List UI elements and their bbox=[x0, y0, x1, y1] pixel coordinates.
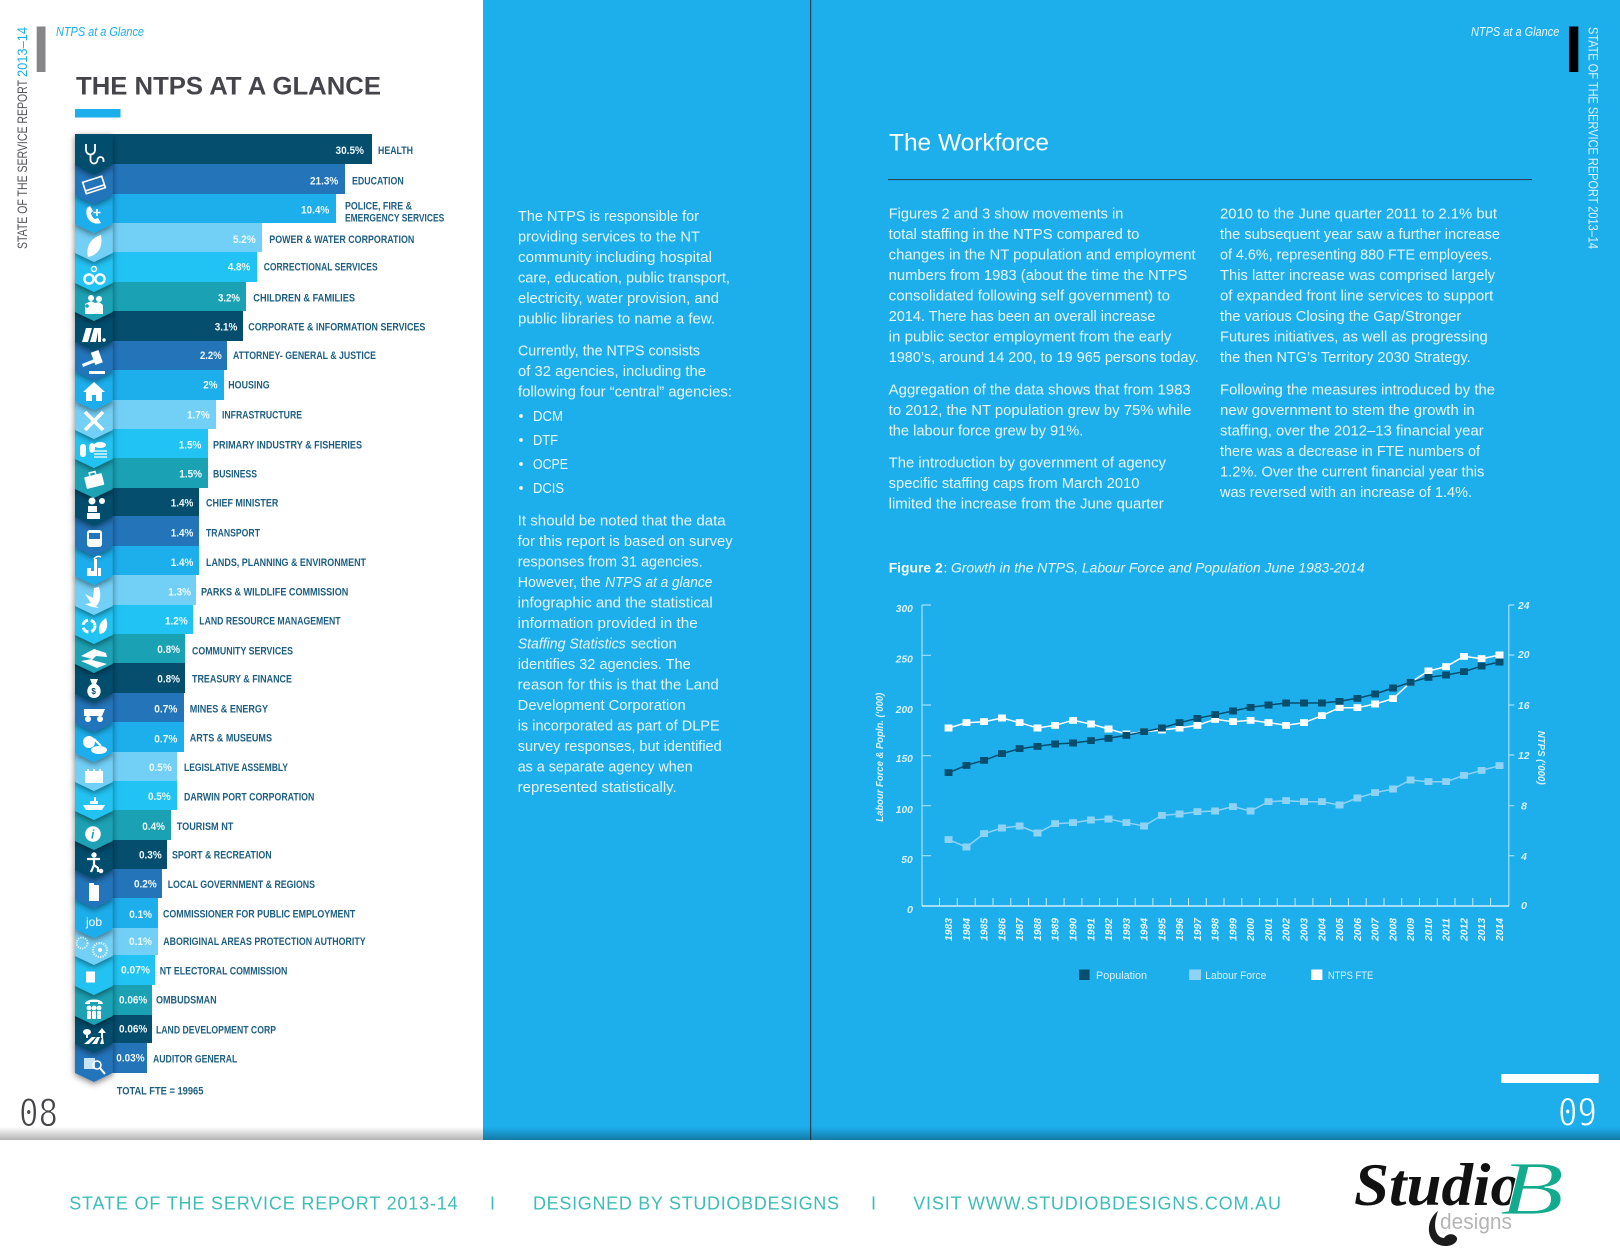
icon: money bag bbox=[87, 679, 101, 698]
bar: Auditor General: 0.03% bbox=[116, 1052, 145, 1064]
bar: Treasury and Finance bbox=[112, 663, 292, 693]
year labels: 2007 bbox=[1371, 918, 1382, 942]
right axis labels: 16 bbox=[1518, 701, 1530, 712]
year labels: 2012 bbox=[1459, 918, 1470, 942]
bar: Mines and Energy: 0.7% bbox=[154, 703, 178, 715]
bar: Arts and Museums bbox=[112, 722, 272, 752]
bar: Education bbox=[112, 164, 404, 194]
bar: Children and Families: CHILDREN & FAMILIES bbox=[253, 293, 355, 305]
text block: NTPS overview column: responses from 31 agencies. bbox=[518, 554, 703, 570]
bar: Transport: TRANSPORT bbox=[206, 528, 260, 540]
text block: workforce column one: the labour force grew by 91%. bbox=[889, 423, 1083, 439]
bar: Mines and Energy: MINES & ENERGY bbox=[190, 703, 268, 715]
year labels: 2006 bbox=[1353, 918, 1364, 942]
heading rule bbox=[888, 179, 1532, 180]
text block: NTPS overview column bbox=[518, 209, 733, 796]
text block: NTPS overview column: DCIS bbox=[533, 481, 564, 497]
bar: Lands, Planning and Environment bbox=[112, 546, 366, 575]
text block: NTPS overview column: represented statistically. bbox=[518, 780, 677, 796]
icon: telephone and people bbox=[85, 1000, 103, 1019]
icon: mining truck bbox=[84, 709, 105, 722]
bar: Parks and Wildlife Commission bbox=[112, 575, 348, 605]
bar: Aboriginal Areas Protection Authority: ABORIGINAL AREAS PROTECTION AUTHORITY bbox=[163, 936, 366, 948]
text block: NTPS overview column: public libraries to name a few. bbox=[518, 312, 715, 328]
page number 09: 09 bbox=[1558, 1092, 1597, 1135]
bar: Education: 21.3% bbox=[310, 175, 339, 187]
bar: Sport and Recreation bbox=[112, 840, 272, 869]
running side title: STATE OF THE SERVICE REPORT bbox=[15, 80, 30, 249]
icon: NT map bbox=[89, 883, 99, 901]
figure caption: Figure 2 bbox=[889, 560, 943, 576]
bar: Primary Industry and Fisheries bbox=[112, 429, 362, 458]
text block: workforce column one bbox=[889, 206, 1199, 513]
section tag: NTPS at a Glance bbox=[1471, 25, 1559, 39]
bar: Aboriginal Areas Protection Authority bbox=[112, 928, 366, 955]
panel: blue background page bbox=[483, 0, 1620, 1140]
line chart: growth in NTPS, labour force and population bbox=[875, 601, 1546, 982]
year labels: 1988 bbox=[1033, 918, 1044, 941]
bar: Corporate and Information Services: 3.1% bbox=[215, 321, 238, 333]
bar: Police, Fire and Emergency Services: EMERGENCY SERVICES bbox=[345, 212, 444, 224]
right axis labels: 12 bbox=[1518, 751, 1530, 762]
text block: workforce column one: limited the increase from the June quarter bbox=[889, 497, 1164, 513]
icon: land and trees bbox=[83, 1028, 106, 1044]
left axis labels: 200 bbox=[895, 705, 913, 716]
white page-number bar bbox=[1501, 1074, 1599, 1083]
bar: Arts and Museums: 0.7% bbox=[154, 734, 178, 746]
text block: workforce column one: changes in the NT population and employment bbox=[889, 248, 1196, 264]
left axis labels: 300 bbox=[896, 604, 913, 615]
bar: Health: HEALTH bbox=[378, 145, 413, 157]
text block: workforce column one: The introduction by government of agency bbox=[889, 456, 1167, 472]
text block: workforce column two: 2010 to the June quarter 2011 to 2.1% but bbox=[1220, 206, 1497, 222]
bar: Corporate and Information Services bbox=[112, 311, 425, 341]
bar: Community Services: 0.8% bbox=[157, 644, 181, 656]
year labels: 1986 bbox=[997, 918, 1008, 941]
bar: Power and Water: 5.2% bbox=[233, 234, 256, 246]
year labels: 2010 bbox=[1424, 918, 1435, 942]
title: THE NTPS AT A GLANCE bbox=[76, 73, 381, 101]
footer credits: DESIGNED BY STUDIOBDESIGNS bbox=[533, 1194, 839, 1214]
right axis labels: 4 bbox=[1520, 852, 1527, 863]
right axis labels: 20 bbox=[1517, 650, 1530, 661]
text block: workforce column one: in public sector employment from the early bbox=[889, 330, 1172, 346]
text block: NTPS overview column: Currently, the NTPS consists bbox=[518, 344, 700, 360]
bar: Commissioner for Public Employment: 0.1% bbox=[129, 909, 153, 921]
text block: workforce column two bbox=[1219, 206, 1500, 501]
bar: Darwin Port Corporation: DARWIN PORT CORPORATION bbox=[184, 791, 314, 803]
icon: ballot bbox=[86, 972, 95, 982]
left page header bbox=[15, 25, 144, 249]
bar: Aboriginal Areas Protection Authority: 0.1% bbox=[129, 936, 153, 948]
bar: Business: BUSINESS bbox=[213, 469, 257, 481]
bar: Police, Fire and Emergency Services bbox=[112, 194, 444, 224]
bars and labels bbox=[112, 134, 444, 1073]
icon: information bbox=[85, 826, 101, 842]
text block: workforce column one: specific staffing caps from March 2010 bbox=[889, 476, 1139, 492]
text block: workforce column two: of 4.6%, representing 880 FTE employees. bbox=[1220, 248, 1492, 264]
bar: Infrastructure bbox=[112, 400, 302, 429]
bar: Tourism NT: 0.4% bbox=[142, 821, 166, 833]
left axis labels bbox=[895, 604, 913, 916]
bar: Housing: 2% bbox=[203, 379, 218, 391]
bar: Legislative Assembly bbox=[112, 752, 288, 781]
right axis labels: 8 bbox=[1521, 802, 1527, 812]
bar: Correctional Services: CORRECTIONAL SERVICES bbox=[264, 262, 378, 274]
icon: gavel bbox=[82, 350, 105, 374]
bar: Treasury and Finance: 0.8% bbox=[157, 674, 181, 686]
series: NTPS FTE bbox=[949, 655, 1500, 734]
text block: workforce column one: total staffing in the NTPS compared to bbox=[889, 227, 1139, 243]
text block: workforce column two: the then NTG’s Territory 2030 Strategy. bbox=[1220, 350, 1471, 366]
bar: Auditor General bbox=[112, 1043, 238, 1073]
text block: NTPS overview column: Staffing Statistics bbox=[518, 636, 626, 652]
icon: wheat and fish bbox=[80, 442, 107, 457]
bar: Power and Water bbox=[112, 223, 414, 252]
bar: Housing: HOUSING bbox=[228, 379, 270, 391]
left axis labels: 50 bbox=[901, 855, 913, 866]
icon: bus bbox=[87, 530, 102, 547]
year labels: 2002 bbox=[1282, 918, 1293, 942]
text block: NTPS overview column: survey responses, but identified bbox=[518, 739, 722, 755]
bar: Mines and Energy bbox=[112, 693, 268, 722]
year labels: 1994 bbox=[1140, 918, 1151, 941]
icon: job search: job bbox=[85, 915, 102, 929]
series: labour force bbox=[949, 766, 1500, 847]
legend bbox=[1079, 970, 1373, 982]
bar: Community Services: COMMUNITY SERVICES bbox=[192, 645, 293, 657]
logo: Studio B Designs: B bbox=[1500, 1147, 1564, 1231]
year labels: 1992 bbox=[1104, 918, 1115, 941]
year labels: 1985 bbox=[980, 918, 991, 941]
bar: Commissioner for Public Employment bbox=[112, 898, 356, 928]
left axis labels: 0 bbox=[907, 905, 913, 916]
figure caption: Growth in the NTPS, Labour Force and Population June 1983-2014 bbox=[951, 560, 1365, 576]
year labels: 1995 bbox=[1157, 918, 1168, 941]
bar: Correctional Services bbox=[112, 252, 378, 282]
text block: NTPS overview column: The NTPS is responsible for bbox=[518, 209, 699, 225]
bar: Business bbox=[112, 458, 257, 488]
bar: Primary Industry and Fisheries: PRIMARY INDUSTRY & FISHERIES bbox=[213, 439, 362, 451]
text block: workforce column two: Futures initiatives, as well as progressing bbox=[1220, 330, 1488, 346]
text block: NTPS overview column: following four “central” agencies: bbox=[518, 384, 732, 400]
bar: Correctional Services: 4.8% bbox=[228, 262, 251, 274]
bar: Business: 1.5% bbox=[179, 469, 203, 481]
bar: Land Resource Management: 1.2% bbox=[165, 616, 188, 628]
bar: Attorney-General and Justice bbox=[112, 341, 376, 370]
text block: workforce column one: numbers from 1983 (about the time the NTPS bbox=[889, 268, 1188, 284]
bar: Chief Minister: 1.4% bbox=[171, 497, 194, 509]
bar: Power and Water: POWER & WATER CORPORATION bbox=[269, 234, 414, 246]
bar: Infrastructure: 1.7% bbox=[187, 410, 210, 422]
text block: workforce column one: Figures 2 and 3 show movements in bbox=[889, 206, 1123, 222]
icon: crossed tools bbox=[85, 412, 103, 430]
series: population bbox=[949, 662, 1500, 773]
icon: stethoscope bbox=[86, 144, 104, 164]
bar: Land Resource Management bbox=[112, 605, 341, 634]
footer credits bbox=[69, 1194, 1281, 1214]
year labels: 2014 bbox=[1495, 918, 1506, 942]
section tag: NTPS at a Glance bbox=[56, 25, 144, 39]
text block: workforce column two: there was a decrease in FTE numbers of bbox=[1220, 444, 1481, 460]
text block: NTPS overview column: community including hospital bbox=[518, 250, 712, 266]
bar: Legislative Assembly: 0.5% bbox=[149, 762, 172, 774]
text block: workforce column two: 1.2%. Over the current financial year this bbox=[1220, 464, 1484, 480]
text block: workforce column two: This latter increase was comprised largely bbox=[1220, 268, 1496, 284]
year labels bbox=[944, 918, 1506, 942]
text block: NTPS overview column: Development Corporation bbox=[518, 698, 686, 714]
year labels: 2011 bbox=[1442, 918, 1453, 942]
text block: NTPS overview column: It should be noted that the data bbox=[518, 513, 727, 529]
total FTE note: TOTAL FTE = 19965 bbox=[117, 1086, 203, 1098]
icon: briefcase bbox=[83, 470, 104, 489]
text block: NTPS overview column: electricity, water provision, and bbox=[518, 291, 719, 307]
icon: emergency phone bbox=[86, 206, 101, 224]
panel: agency share bar chart bbox=[75, 134, 444, 1098]
bar: Land Development Corp: 0.06% bbox=[119, 1024, 148, 1036]
bar: Local Government and Regions: 0.2% bbox=[134, 878, 157, 890]
text block: NTPS overview column: for this report is based on survey bbox=[518, 534, 733, 550]
bar: Corporate and Information Services: CORPORATE & INFORMATION SERVICES bbox=[248, 321, 425, 333]
text block: NTPS overview column: of 32 agencies, including the bbox=[518, 364, 706, 380]
year labels: 2001 bbox=[1264, 918, 1275, 942]
text block: workforce column two: staffing, over the 2012–13 financial year bbox=[1220, 423, 1484, 439]
grey tab bbox=[37, 26, 46, 72]
bar: Children and Families bbox=[112, 282, 355, 311]
bar: Ombudsman bbox=[112, 985, 217, 1015]
bar: Police, Fire and Emergency Services: POLICE, FIRE & bbox=[345, 200, 412, 212]
bar: Ombudsman: 0.06% bbox=[119, 995, 148, 1007]
icon: leaf bbox=[87, 235, 101, 257]
year labels: 2005 bbox=[1335, 918, 1346, 942]
text block: NTPS overview column: However, the bbox=[518, 575, 601, 591]
year labels: 2013 bbox=[1477, 918, 1488, 942]
page bottom shadow bbox=[0, 1127, 1620, 1140]
icon: handcuffs bbox=[84, 266, 105, 284]
legend: NTPS FTE bbox=[1328, 970, 1373, 982]
legend: Population bbox=[1096, 970, 1147, 982]
bar: Commissioner for Public Employment: COMMISSIONER FOR PUBLIC EMPLOYMENT bbox=[163, 908, 356, 920]
right axis labels: 0 bbox=[1521, 901, 1527, 912]
icon: recycling bbox=[83, 618, 107, 634]
bar: Arts and Museums: ARTS & MUSEUMS bbox=[190, 733, 272, 745]
left axis labels: 250 bbox=[895, 654, 913, 666]
running side title: STATE OF THE SERVICE REPORT 2013–14 bbox=[1585, 27, 1600, 249]
year labels: 1990 bbox=[1068, 918, 1080, 941]
bar: Auditor General: AUDITOR GENERAL bbox=[153, 1054, 238, 1066]
text block: workforce column one: Aggregation of the data shows that from 1983 bbox=[889, 382, 1191, 398]
bar: NT Electoral Commission bbox=[112, 955, 287, 985]
year labels: 1996 bbox=[1175, 918, 1186, 941]
bar: Transport: 1.4% bbox=[171, 528, 194, 540]
bar: Education: EDUCATION bbox=[352, 175, 404, 187]
icon: house bbox=[83, 382, 105, 401]
bar: Ombudsman: OMBUDSMAN bbox=[156, 995, 217, 1007]
bar: Sport and Recreation: SPORT & RECREATION bbox=[172, 850, 272, 862]
left axis labels: 100 bbox=[896, 805, 913, 816]
icon: handshake bbox=[81, 649, 107, 668]
text block: workforce column one: 2014. There has been an overall increase bbox=[889, 309, 1155, 325]
text block: workforce column two: the subsequent year saw a further increase bbox=[1220, 227, 1500, 243]
bar: Lands, Planning and Environment: 1.4% bbox=[171, 557, 194, 569]
bar: Darwin Port Corporation bbox=[112, 781, 314, 810]
chevron ribbon segments bbox=[75, 134, 113, 1082]
page number 08: 08 bbox=[19, 1092, 58, 1135]
bar: Chief Minister bbox=[112, 488, 279, 516]
footer credits: I bbox=[490, 1194, 495, 1214]
text block: workforce column one: consolidated following self government) to bbox=[889, 289, 1170, 305]
footer credits: STATE OF THE SERVICE REPORT 2013-14 bbox=[69, 1194, 458, 1214]
footer credits: VISIT WWW.STUDIOBDESIGNS.COM.AU bbox=[913, 1194, 1281, 1214]
logo: Studio B Designs: Studio bbox=[1354, 1152, 1522, 1218]
bar: Local Government and Regions bbox=[112, 869, 315, 898]
figure caption: : bbox=[944, 560, 947, 576]
text block: NTPS overview column: reason for this is that the Land bbox=[518, 677, 719, 693]
text block: NTPS overview column: providing services to the NT bbox=[518, 230, 700, 246]
icon: factory bbox=[87, 556, 101, 576]
bar: NT Electoral Commission: NT ELECTORAL COMMISSION bbox=[160, 965, 287, 977]
bar: Local Government and Regions: LOCAL GOVERNMENT & REGIONS bbox=[168, 879, 315, 891]
bar: Police, Fire and Emergency Services: 10.4% bbox=[301, 204, 330, 216]
year labels: 2000 bbox=[1246, 918, 1257, 942]
bar: Tourism NT bbox=[112, 810, 234, 840]
bar: Attorney-General and Justice: ATTORNEY- GENERAL & JUSTICE bbox=[233, 350, 376, 362]
legend: Labour Force bbox=[1205, 970, 1266, 982]
year labels: 1999 bbox=[1228, 918, 1239, 941]
icon: money bag: $ bbox=[91, 687, 96, 696]
icon: ship bbox=[83, 797, 105, 810]
year labels: 2004 bbox=[1317, 918, 1328, 942]
left axis labels: 150 bbox=[896, 754, 913, 765]
icon: information: i bbox=[91, 828, 95, 842]
icon: speaker at podium bbox=[87, 498, 105, 519]
footer credits: I bbox=[871, 1194, 876, 1214]
black tab bbox=[1569, 26, 1578, 72]
year labels: 1993 bbox=[1122, 918, 1133, 941]
bar: Tourism NT: TOURISM NT bbox=[177, 821, 234, 833]
page spine divider bbox=[810, 0, 811, 1140]
bar: Housing bbox=[112, 370, 270, 400]
bar: Infrastructure: INFRASTRUCTURE bbox=[222, 410, 302, 422]
title underline bbox=[75, 109, 120, 118]
icon: parliament bbox=[85, 769, 103, 783]
agency icons bbox=[76, 144, 107, 1074]
text block: workforce column two: Following the measures introduced by the bbox=[1220, 382, 1495, 398]
icon: family bbox=[85, 295, 103, 314]
year labels: 1987 bbox=[1015, 918, 1026, 941]
year labels: 1989 bbox=[1051, 918, 1062, 941]
bar: Sport and Recreation: 0.3% bbox=[139, 850, 162, 862]
text block: NTPS overview column: DCM bbox=[533, 409, 563, 425]
text block: NTPS overview column: as a separate agency when bbox=[518, 759, 693, 775]
text block: workforce column two: new government to stem the growth in bbox=[1220, 403, 1475, 419]
bar: Land Development Corp: LAND DEVELOPMENT CORP bbox=[156, 1024, 276, 1036]
left axis title: Labour Force & Popln. (‘000) bbox=[875, 692, 886, 822]
icon: arts bbox=[83, 736, 107, 754]
bar: Parks and Wildlife Commission: 1.3% bbox=[168, 586, 192, 598]
bar: Health bbox=[112, 134, 413, 164]
year labels: 2008 bbox=[1388, 918, 1399, 942]
right page header bbox=[1471, 25, 1600, 249]
text block: workforce column two: was reversed with an increase of 1.4%. bbox=[1219, 485, 1472, 501]
bar: Legislative Assembly: LEGISLATIVE ASSEMBLY bbox=[184, 762, 288, 774]
year labels: 2009 bbox=[1406, 918, 1417, 942]
bar: Lands, Planning and Environment: LANDS, PLANNING & ENVIRONMENT bbox=[206, 557, 366, 569]
year labels: 1991 bbox=[1086, 918, 1097, 941]
icon: book bbox=[83, 176, 105, 194]
text block: NTPS overview column: NTPS at a glance bbox=[605, 575, 712, 591]
bar: Transport bbox=[112, 516, 260, 546]
text block: workforce column two: of expanded front line services to support bbox=[1220, 289, 1493, 305]
text block: NTPS overview column: infographic and the statistical bbox=[518, 595, 713, 611]
icon: footballer bbox=[87, 853, 102, 872]
heading: The Workforce: The Workforce bbox=[889, 130, 1049, 157]
text block: workforce column one: 1980’s, around 14 200, to 19 965 persons today. bbox=[889, 350, 1199, 366]
right axis title: NTPS (‘000) bbox=[1535, 731, 1546, 785]
bar: Children and Families: 3.2% bbox=[218, 293, 241, 305]
bar: Community Services bbox=[112, 634, 293, 663]
bar: NT Electoral Commission: 0.07% bbox=[121, 965, 151, 977]
bar: Parks and Wildlife Commission: PARKS & WILDLIFE COMMISSION bbox=[201, 586, 348, 598]
bar: Health: 30.5% bbox=[336, 145, 365, 157]
text block: NTPS overview column: OCPE bbox=[533, 457, 568, 473]
bar: Attorney-General and Justice: 2.2% bbox=[200, 350, 222, 362]
year labels: 1984 bbox=[962, 918, 973, 941]
text block: NTPS overview column: DTF bbox=[533, 433, 558, 449]
year labels: 1998 bbox=[1211, 918, 1222, 941]
year labels: 2003 bbox=[1300, 918, 1310, 942]
text block: workforce column two: the various Closing the Gap/Stronger bbox=[1220, 309, 1461, 325]
axes and ticks bbox=[922, 605, 1514, 906]
icon: corporate buildings bbox=[82, 328, 106, 342]
text block: NTPS overview column: section bbox=[631, 636, 677, 652]
bar: Land Resource Management: LAND RESOURCE MANAGEMENT bbox=[199, 616, 341, 628]
icon: eagle bbox=[85, 587, 100, 608]
icon: audit magnifier bbox=[84, 1058, 105, 1074]
text block: NTPS overview column: information provided in the bbox=[518, 616, 698, 632]
text block: NTPS overview column: identifies 32 agencies. The bbox=[518, 657, 691, 673]
text block: NTPS overview column: care, education, public transport, bbox=[518, 270, 730, 286]
bar: Land Development Corp bbox=[112, 1015, 276, 1043]
logo: Studio B Designs bbox=[1354, 1147, 1564, 1246]
bar: Chief Minister: CHIEF MINISTER bbox=[206, 497, 279, 509]
bar: Darwin Port Corporation: 0.5% bbox=[148, 791, 171, 803]
right axis labels bbox=[1517, 601, 1530, 912]
year labels: 1983 bbox=[944, 918, 955, 941]
year labels: 1997 bbox=[1193, 918, 1204, 941]
right axis labels: 24 bbox=[1517, 601, 1530, 612]
bar: Primary Industry and Fisheries: 1.5% bbox=[179, 439, 202, 451]
logo: Studio B Designs: designs bbox=[1440, 1209, 1512, 1234]
running side title year: 2013–14 bbox=[15, 27, 30, 77]
bar: Treasury and Finance: TREASURY & FINANCE bbox=[192, 674, 292, 686]
text block: NTPS overview column: is incorporated as part of DLPE bbox=[518, 718, 720, 734]
icon: aboriginal dot circles bbox=[76, 938, 107, 957]
text block: workforce column one: to 2012, the NT population grew by 75% while bbox=[889, 403, 1191, 419]
